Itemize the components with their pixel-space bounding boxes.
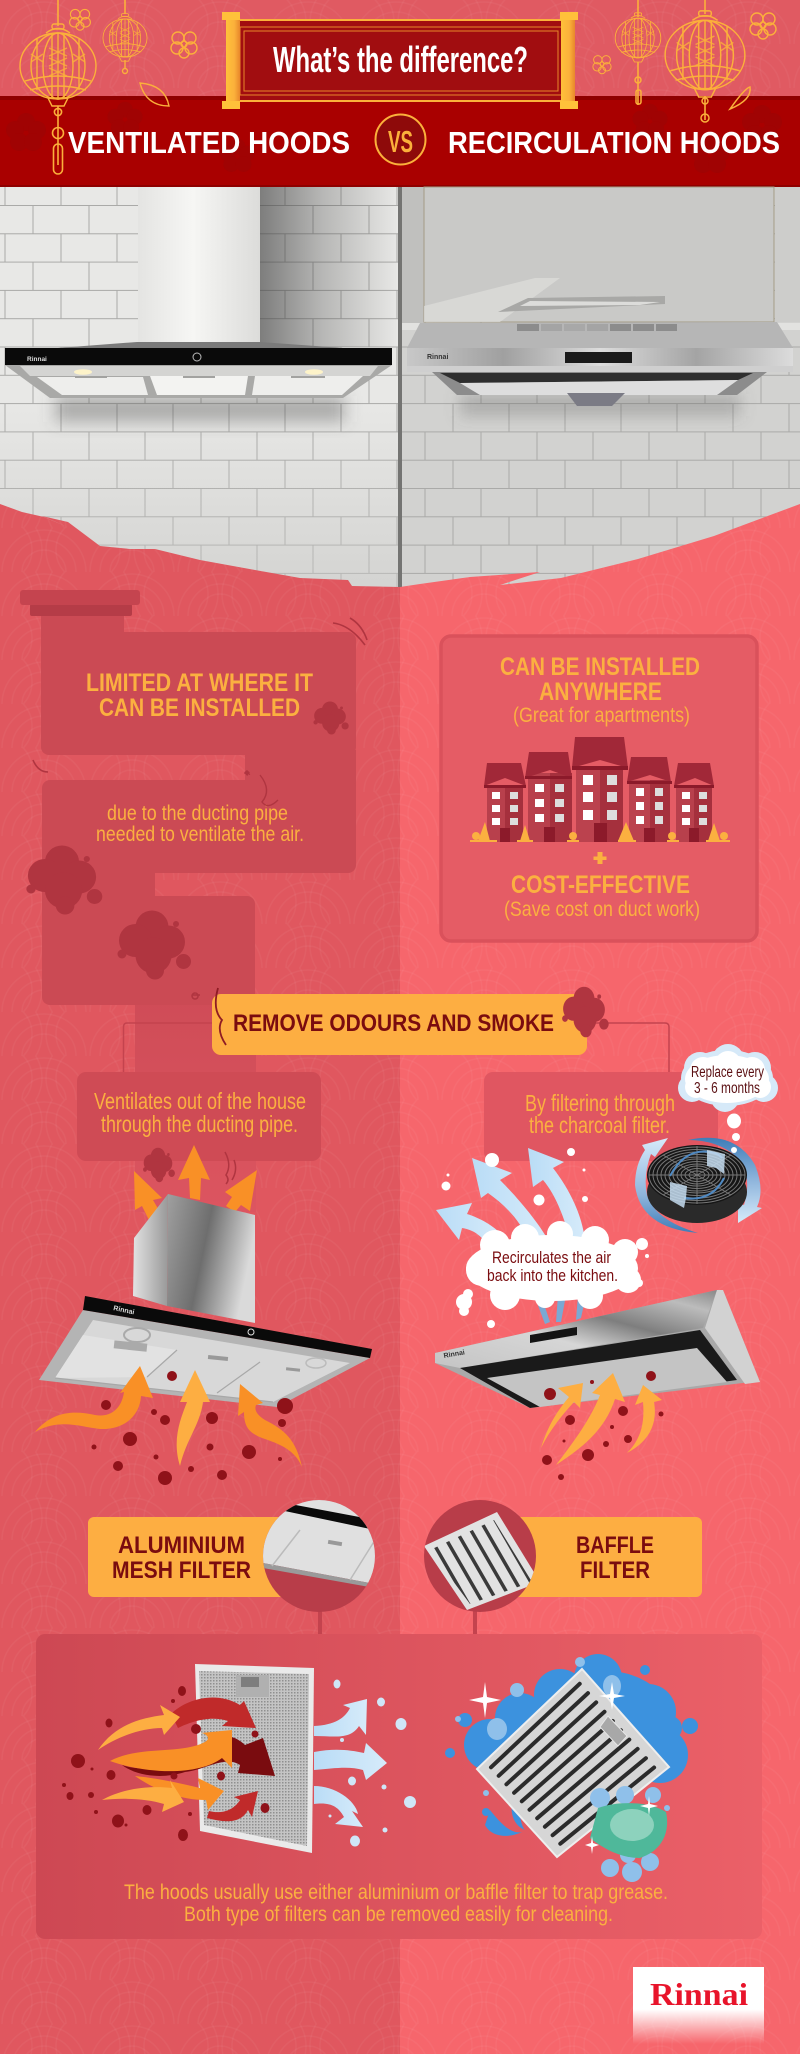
image: baffle close-up bbox=[424, 1500, 540, 1612]
ventilated hood photo: Rinnai bbox=[27, 356, 47, 363]
callout: ventilates out bbox=[77, 1072, 321, 1184]
icon: ventilated hood illustration bbox=[39, 1194, 372, 1407]
decoration: left lanterns bbox=[20, 0, 197, 174]
banner: remove odours and smoke bbox=[192, 987, 609, 1055]
header band bbox=[0, 0, 800, 187]
logo: Rinnai: Rinnai bbox=[650, 1976, 748, 2012]
label: aluminium mesh filter: ALUMINIUM bbox=[118, 1532, 245, 1559]
label: baffle filter: FILTER bbox=[580, 1557, 650, 1584]
callout: filtering through charcoal bbox=[484, 1072, 718, 1161]
text: ducting reason: due to the ducting pipe bbox=[107, 802, 288, 825]
callout: replace every 3-6 months bbox=[678, 1044, 778, 1153]
vs badge: VS bbox=[388, 124, 413, 159]
icon: ventilated hood illustration: Rinnai bbox=[113, 1305, 135, 1316]
smoke puffs on duct bbox=[26, 618, 367, 980]
heading: limited: LIMITED AT WHERE IT bbox=[86, 669, 313, 697]
text: cleaning note: Both type of filters can be removed easily for cleaning. bbox=[184, 1903, 613, 1926]
icon: recirculation hood illustration: Rinnai bbox=[443, 1349, 465, 1360]
icon: plus bbox=[594, 852, 606, 864]
heading: limited line two: CAN BE INSTALLED bbox=[99, 694, 300, 722]
heading: cost-effective: COST-EFFECTIVE bbox=[511, 871, 690, 899]
grease droplets: recirculation hood bbox=[542, 1371, 664, 1480]
text: apartments note: (Great for apartments) bbox=[513, 704, 690, 727]
title text: What’s the difference? bbox=[273, 39, 528, 80]
callout: filtering through charcoal: By filtering through bbox=[525, 1090, 675, 1116]
grease droplets: ventilated hood bbox=[92, 1371, 293, 1485]
heading: anywhere: CAN BE INSTALLED bbox=[500, 653, 700, 681]
arrows: recirculated air bbox=[436, 1148, 586, 1324]
vs badge bbox=[376, 114, 426, 164]
recirculation hood photo: Rinnai bbox=[427, 354, 448, 361]
callout: recirculates the air: back into the kitchen. bbox=[487, 1266, 618, 1285]
label: aluminium mesh filter bbox=[88, 1500, 375, 1612]
arrows: ventilated air out of duct bbox=[134, 1145, 257, 1232]
decoration: right lanterns bbox=[593, 0, 776, 122]
icon: charcoal filter bbox=[635, 1138, 762, 1233]
callout: filtering through charcoal: the charcoal filter. bbox=[529, 1112, 670, 1138]
label: baffle filter bbox=[424, 1500, 702, 1612]
illustration: baffle filter with soap bbox=[445, 1654, 698, 1882]
arrows: ventilated air into hood bbox=[35, 1366, 302, 1467]
callout: replace every 3-6 months: Replace every bbox=[691, 1064, 764, 1081]
text: duct work saving: (Save cost on duct work) bbox=[504, 898, 700, 921]
banner: remove odours and smoke: REMOVE ODOURS AND SMOKE bbox=[233, 1010, 554, 1037]
image: hood close-up bbox=[263, 1500, 375, 1612]
ventilated hood photo bbox=[5, 187, 392, 398]
icon: apartment buildings bbox=[470, 737, 730, 842]
panel: filters bbox=[36, 1634, 762, 1939]
connectors: filters to panel bbox=[320, 1605, 475, 1640]
heading: ventilated hoods: VENTILATED HOODS bbox=[68, 125, 350, 160]
title scroll bbox=[222, 12, 578, 109]
text: filters explanation: The hoods usually use either aluminium or baffle filter to trap grease. bbox=[124, 1881, 668, 1904]
label: baffle filter: BAFFLE bbox=[576, 1532, 654, 1559]
photo: kitchen walls with hoods bbox=[0, 187, 800, 600]
callout: recirculates the air: Recirculates the air bbox=[492, 1248, 611, 1267]
connector lines to banner bbox=[124, 1023, 669, 1072]
callout: replace every 3-6 months: 3 - 6 months bbox=[694, 1080, 760, 1097]
label: aluminium mesh filter: MESH FILTER bbox=[112, 1557, 251, 1584]
icon: recirculation hood illustration bbox=[435, 1290, 760, 1408]
recirculation hood photo bbox=[407, 296, 793, 406]
panel: installed anywhere bbox=[441, 636, 757, 941]
callout: recirculates the air bbox=[442, 1148, 649, 1328]
text: ducting reason line two: needed to ventilate the air. bbox=[96, 823, 304, 846]
arrows: air into recirculation hood bbox=[541, 1373, 662, 1465]
page background: torn edge right half bbox=[400, 504, 800, 2054]
callout: ventilates out: Ventilates out of the house bbox=[94, 1088, 306, 1114]
logo: Rinnai bbox=[633, 1967, 764, 2044]
callout: ventilates out: through the ducting pipe. bbox=[101, 1111, 298, 1137]
panel: ducting pipe shape bbox=[20, 590, 356, 1212]
heading: anywhere line two: ANYWHERE bbox=[539, 678, 662, 706]
page background: torn edge left half bbox=[0, 504, 400, 2054]
illustration: mesh filter with grease bbox=[62, 1664, 416, 1853]
